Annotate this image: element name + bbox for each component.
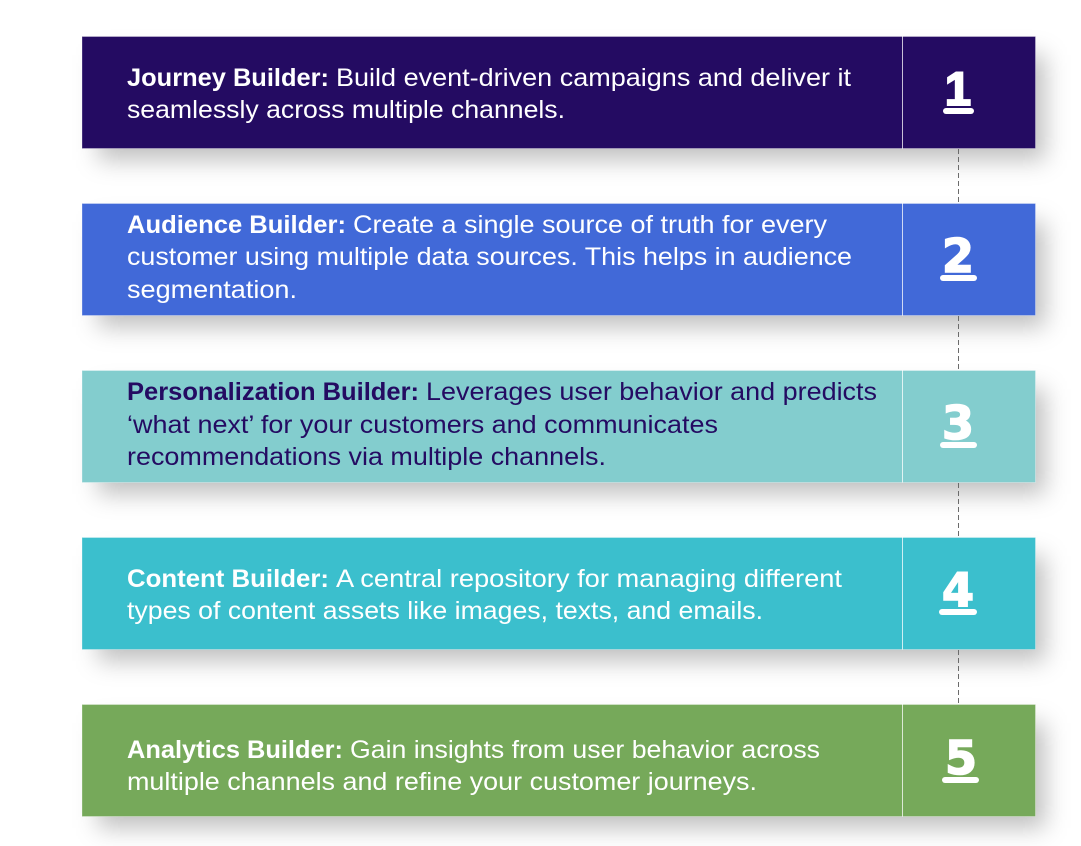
card 3: Personalization Builder — [82, 370, 1045, 494]
card 5: Analytics Builder — [82, 704, 1045, 828]
heading: Personalization Builder: Personalization Builder: — [127, 378, 419, 406]
text: Personalization Builder description: recommendations via multiple channels. — [127, 443, 606, 471]
heading: Content Builder: Content Builder: — [127, 565, 329, 593]
number 4: 4 — [942, 563, 974, 617]
connector 4-5 — [958, 650, 960, 704]
text: Journey Builder description: seamlessly across multiple channels. — [127, 96, 565, 124]
text: Content Builder description: A central repository for managing different — [336, 565, 842, 593]
card 2: Audience Builder — [82, 204, 1045, 327]
connector 3-4 — [958, 483, 960, 537]
text: Content Builder description: types of content assets like images, texts, and emails. — [127, 597, 763, 625]
heading: Audience Builder: Audience Builder: — [127, 211, 346, 239]
text: Analytics Builder description — [127, 736, 820, 796]
number 2: 2 — [942, 229, 974, 283]
number 3: 3 — [942, 396, 974, 450]
card 4: Content Builder — [82, 538, 1045, 661]
text: Journey Builder description: Build event-driven campaigns and deliver it — [336, 64, 851, 92]
heading: Journey Builder: Journey Builder: — [127, 64, 329, 92]
text: Audience Builder description: segmentation. — [127, 276, 297, 304]
number 1: 1 — [945, 62, 971, 115]
connector 1-2 — [958, 149, 960, 203]
text: Journey Builder description — [127, 64, 851, 124]
text: Personalization Builder description — [127, 378, 877, 471]
heading: Analytics Builder: Analytics Builder: — [127, 736, 343, 764]
text: Audience Builder description: Create a single source of truth for every — [353, 211, 828, 239]
text: Audience Builder description: customer using multiple data sources. This helps in audience — [127, 243, 852, 271]
text: Personalization Builder description: ‘what next’ for your customers and communicates — [127, 411, 718, 439]
connector 2-3 — [958, 316, 960, 370]
text: Audience Builder description — [127, 211, 852, 304]
text: Personalization Builder description: Leverages user behavior and predicts — [426, 378, 877, 406]
text: Analytics Builder description: Gain insights from user behavior across — [350, 736, 820, 764]
text: Content Builder description — [127, 565, 842, 625]
card 1: Journey Builder — [82, 36, 1045, 160]
number 5: 5 — [945, 731, 977, 785]
text: Analytics Builder description: multiple channels and refine your customer journeys. — [127, 768, 757, 796]
